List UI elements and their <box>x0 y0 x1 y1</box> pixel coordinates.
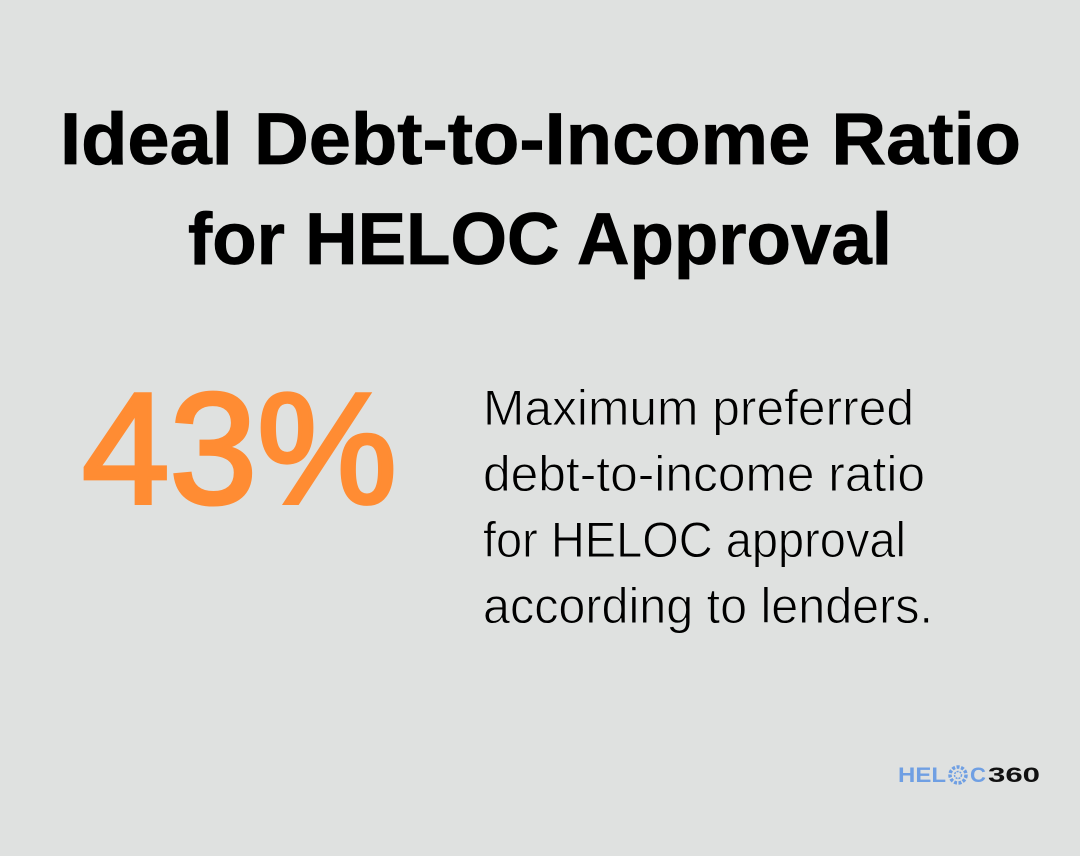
title: for HELOC Approval <box>188 199 892 280</box>
logo: HELOC360: 360 <box>988 764 1040 787</box>
icon: logo swirl <box>950 767 966 783</box>
description text <box>483 380 933 634</box>
logo: HELOC360 <box>898 764 1040 787</box>
description text: according to lenders. <box>483 578 933 634</box>
description text: debt-to-income ratio <box>483 446 925 502</box>
title: Ideal Debt-to-Income Ratio <box>60 99 1021 180</box>
logo: HELOC360: HEL <box>898 764 946 787</box>
logo: HELOC360: C <box>970 764 986 787</box>
big statistic: 43%: 43% <box>82 361 397 537</box>
description text: Maximum preferred <box>483 380 914 436</box>
description text: for HELOC approval <box>483 512 906 568</box>
title <box>60 99 1021 280</box>
